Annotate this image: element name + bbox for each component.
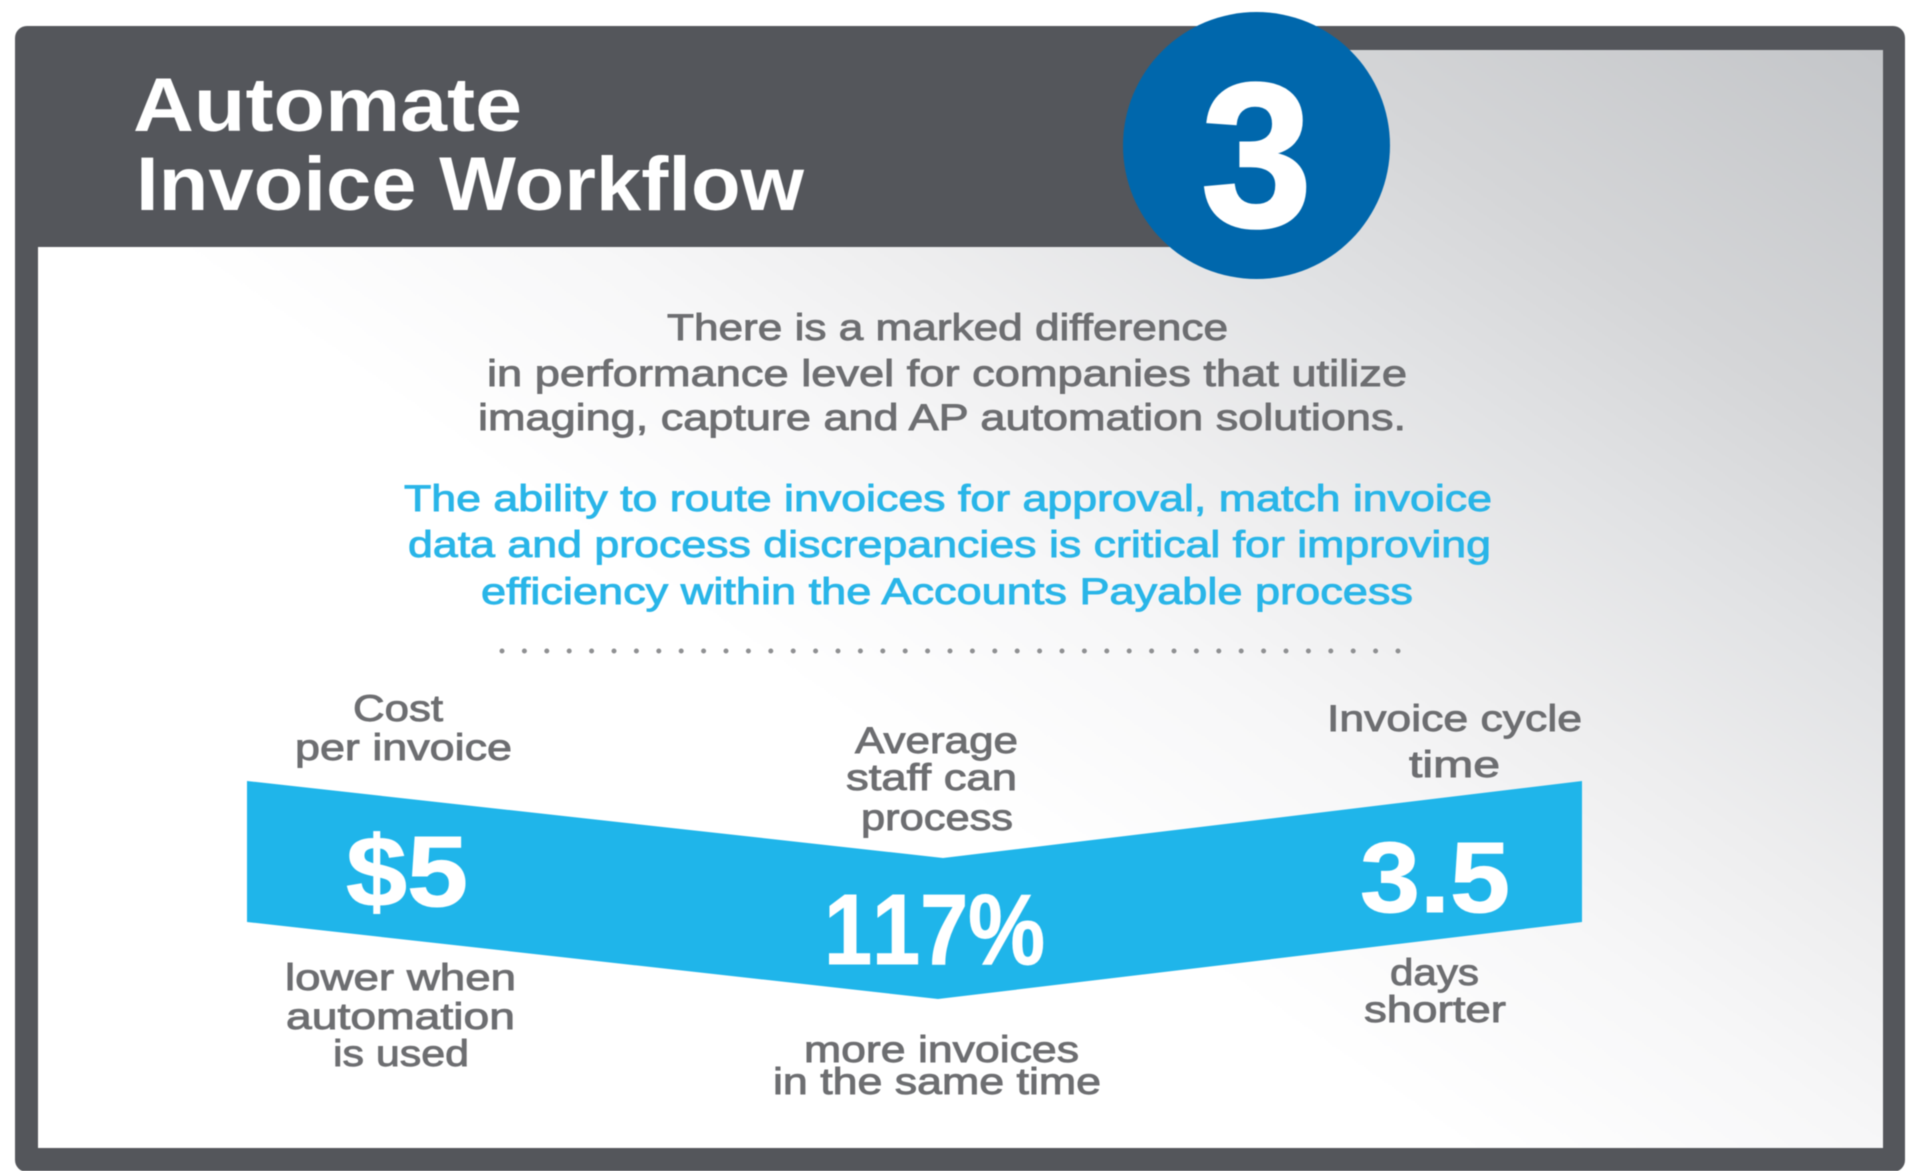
title: Automate [133, 63, 522, 148]
text block: intro paragraph: imaging, capture and AP automation solutions. [478, 397, 1406, 438]
stat: staff capacity: Average [855, 720, 1018, 761]
chart: blue chevron band [247, 781, 1582, 999]
stat: staff capacity: staff can [846, 757, 1017, 798]
stat: invoice cycle time: days [1390, 952, 1479, 993]
stat: cost per invoice: Cost [353, 688, 444, 729]
stat: staff capacity: process [861, 797, 1013, 838]
stat: invoice cycle time: 3.5 [1360, 822, 1510, 934]
text block: intro paragraph [478, 307, 1407, 438]
stat: invoice cycle time [1327, 698, 1582, 1030]
icon: step number badge [1123, 12, 1390, 279]
text block: blue highlight paragraph [404, 478, 1492, 612]
stat: invoice cycle time: shorter [1364, 989, 1506, 1030]
text block: blue highlight paragraph: data and process discrepancies is critical for improving [408, 524, 1491, 565]
text block: intro paragraph: There is a marked difference [667, 307, 1228, 348]
stat: cost per invoice: automation [286, 996, 515, 1037]
stat: invoice cycle time: Invoice cycle [1327, 698, 1582, 739]
stat: cost per invoice [285, 688, 516, 1074]
title: Invoice Workflow [136, 142, 805, 227]
stat: cost per invoice: $5 [346, 816, 468, 928]
title [133, 63, 805, 227]
stat: staff capacity: more invoices [804, 1029, 1079, 1070]
stat: cost per invoice: per invoice [295, 727, 512, 768]
text block: intro paragraph: in performance level for companies that utilize [487, 353, 1407, 394]
stat: staff capacity [773, 720, 1101, 1102]
stat: staff capacity: in the same time [773, 1061, 1101, 1102]
stat: invoice cycle time: time [1409, 744, 1500, 785]
stat: cost per invoice: is used [333, 1033, 469, 1074]
text block: blue highlight paragraph: The ability to route invoices for approval, match invoice [404, 478, 1492, 519]
stat: staff capacity: 117% [824, 874, 1045, 986]
stat: cost per invoice: lower when [285, 957, 516, 998]
text block: blue highlight paragraph: efficiency within the Accounts Payable process [481, 571, 1413, 612]
icon: step number badge: 3 [1201, 41, 1312, 270]
